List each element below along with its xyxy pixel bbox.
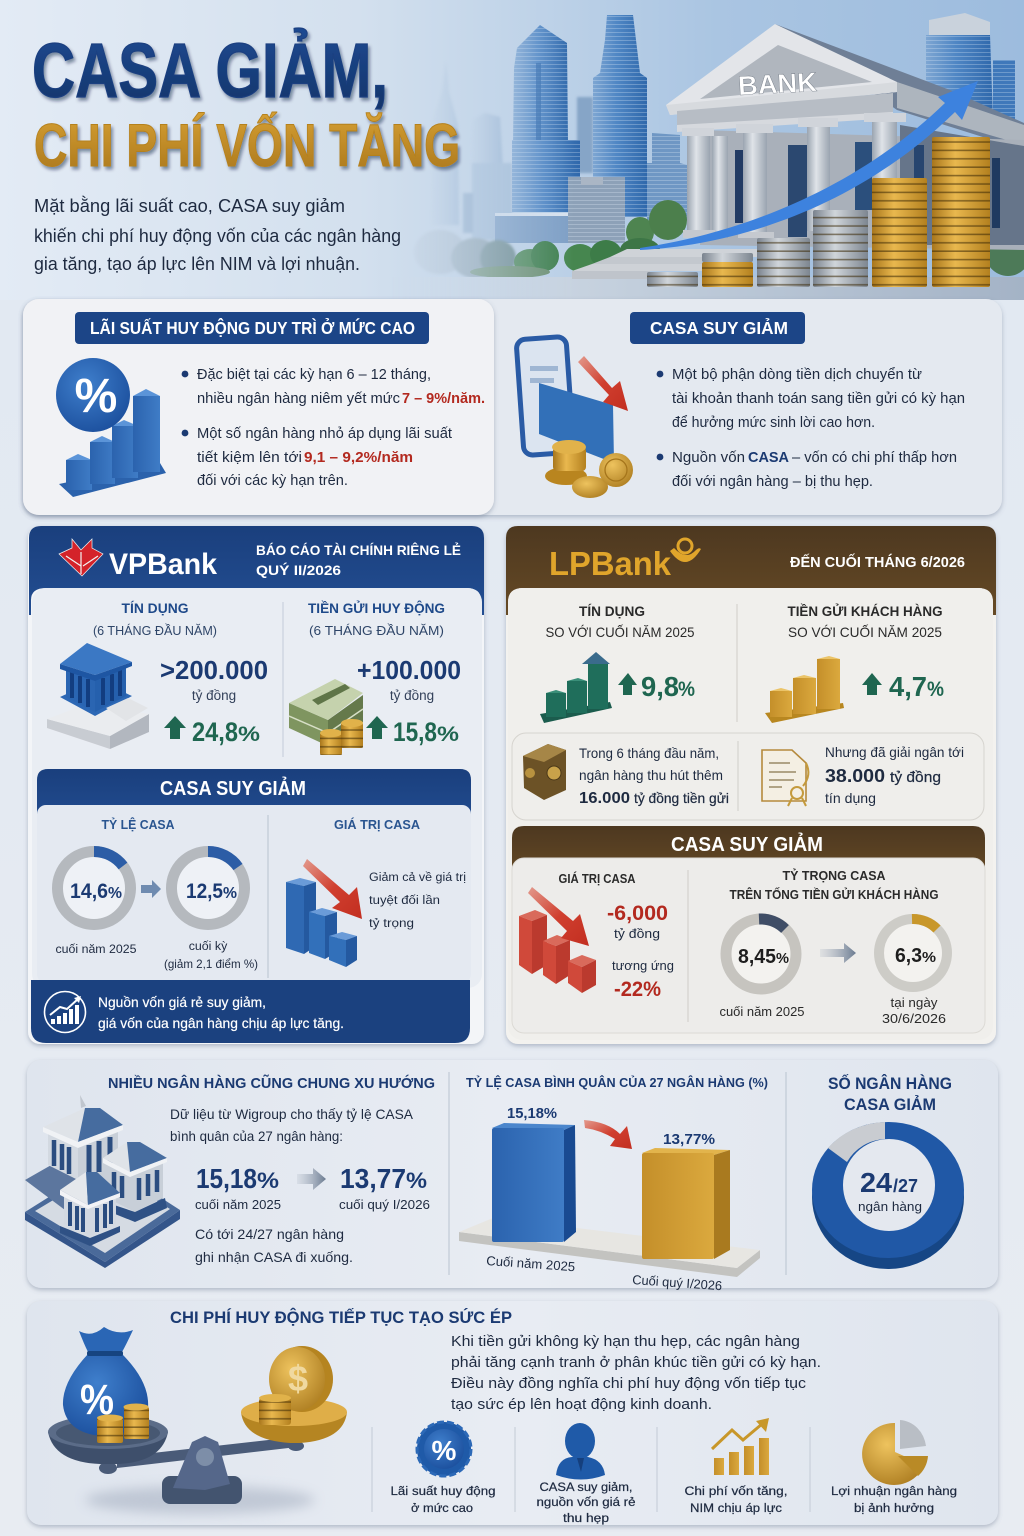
CASA value: [519, 871, 674, 1001]
sector text block: bình quân của 27 ngân hàng:: [170, 1128, 343, 1144]
panel: banking sector trend: [25, 1060, 998, 1293]
item: CASA falls: CASA suy giảm,: [540, 1480, 632, 1494]
sub-panel: mobilisation and disbursement: ngân hàng thu hút thêm: [579, 768, 723, 783]
item: high rates: %: [432, 1435, 457, 1466]
sector text block: cuối quý I/2026: [339, 1197, 430, 1212]
logo: LPBank: LPBank: [549, 545, 672, 582]
sub-panel: mobilisation and disbursement: 16.000: [579, 790, 630, 807]
sector text block: %: [406, 1168, 427, 1193]
callout: cheap funding falls: Nguồn vốn giá rẻ suy giảm,: [98, 994, 266, 1010]
icon: bank on documents: [47, 643, 149, 749]
inner card: [508, 588, 993, 1040]
LPBank header band: [506, 526, 996, 615]
icon: percent disc on bar chart: [56, 358, 166, 497]
icon: green up arrow: [164, 716, 186, 739]
CASA share donuts: 30/6/2026: [882, 1011, 946, 1026]
sub-panel: mobilisation and disbursement: tỷ đồng tiền gửi: [634, 791, 729, 806]
CASA share donuts: TRÊN TỐNG TIỀN GỬI KHÁCH HÀNG: [730, 887, 938, 902]
metric: credit: 24,8: [192, 717, 238, 747]
icon: green up arrow: [862, 673, 882, 695]
sub-panel: mobilisation and disbursement: [512, 733, 984, 820]
title: CASA GIẢM,: [32, 27, 388, 114]
metric: deposits: +100.000: [357, 655, 461, 685]
icon: falling red bars with arrow: [519, 887, 596, 993]
logo: VPBank: VPBank: [109, 548, 217, 581]
CASA value: -6,000: [607, 902, 668, 925]
CASA share donuts: 8,45: [738, 946, 776, 968]
donut: banks with declining CASA: [812, 1073, 964, 1269]
panel: CASA decline: [516, 312, 965, 498]
sector text block: 15,18: [196, 1163, 257, 1194]
metric: deposits: [289, 599, 461, 755]
CASA ratio donuts: 12,5: [186, 880, 223, 903]
icon: green bar chart: [540, 652, 612, 723]
CASA value: [286, 817, 466, 967]
item: cost rises: [684, 1418, 788, 1515]
bank building: [572, 24, 1024, 279]
bullet list: Đặc biệt tại các kỳ hạn 6 – 12 tháng,: [197, 367, 431, 383]
icon: red curved arrow: [584, 1120, 632, 1149]
CASA share donuts: %: [922, 949, 936, 966]
sub-panel: mobilisation and disbursement: Nhưng đã giải ngân tới: [825, 745, 964, 760]
item: CASA falls: [536, 1423, 636, 1525]
bullet list: nhiều ngân hàng niêm yết mức: [197, 391, 401, 407]
icon: group of bank buildings: [25, 1095, 180, 1268]
icon: safe: [523, 744, 566, 800]
metric: deposits: 15,8: [393, 717, 437, 747]
heading: interest rates: LÃI SUẤT HUY ĐỘNG DUY TRÌ Ở MỨC CAO: [90, 317, 415, 338]
CASA value: tỷ trọng: [369, 916, 414, 930]
bar chart: average CASA of 27 banks: TỶ LỆ CASA BÌNH QUÂN CỦA 27 NGÂN HÀNG (%): [466, 1075, 768, 1090]
donut: banks with declining CASA: /27: [893, 1176, 918, 1196]
title: CHI PHÍ VỐN TĂNG: [34, 112, 460, 179]
CASA share donuts: cuối năm 2025: [720, 1004, 804, 1019]
sector text block: cuối năm 2025: [195, 1197, 281, 1212]
donut: banks with declining CASA: 24: [860, 1167, 892, 1198]
metric: credit: >200.000: [160, 655, 268, 685]
metric: credit: %: [678, 678, 695, 701]
metric: customer deposits: [765, 602, 944, 723]
donut: banks with declining CASA: SỐ NGÂN HÀNG: [828, 1073, 952, 1093]
bar chart: average CASA of 27 banks: 15,18%: [507, 1105, 557, 1122]
text block: funding explanation: Điều này đồng nghĩa chi phí huy động vốn tiếp tục: [451, 1375, 806, 1392]
heading: funding cost: CHI PHÍ HUY ĐỘNG TIẾP TỤC TẠO SỨC ÉP: [170, 1308, 512, 1327]
CASA share donuts: [720, 868, 947, 1026]
bar chart: average CASA of 27 banks: [459, 1075, 768, 1293]
metric: credit: (6 THÁNG ĐẦU NĂM): [93, 623, 217, 638]
item: profit affected: [831, 1420, 957, 1515]
metric: deposits: %: [437, 723, 459, 746]
sub-panel: LPBank CASA decline: CASA SUY GIẢM: [671, 833, 823, 856]
panel: interest rates: [23, 299, 494, 515]
report label: QUÝ II/2026: [256, 561, 341, 579]
icon: rising blue arrow: [640, 81, 978, 250]
metric: customer deposits: TIỀN GỬI KHÁCH HÀNG: [788, 602, 942, 620]
bullet list: 9,1 – 9,2%/năm: [304, 450, 413, 466]
icon: chart in circle: [44, 992, 86, 1032]
sector text block: Có tới 24/27 ngân hàng: [195, 1226, 344, 1242]
icon: green up arrow: [618, 673, 637, 695]
bullet list: [657, 367, 965, 490]
icon: percent disc on bar chart: %: [75, 370, 117, 423]
bullet list: Một bộ phận dòng tiền dịch chuyển từ: [672, 367, 922, 383]
bullet list: đối với ngân hàng – bị thu hẹp.: [672, 474, 873, 490]
item: CASA falls: nguồn vốn giá rẻ: [536, 1495, 636, 1509]
CASA share donuts: 6,3: [895, 945, 922, 967]
bank sign: BANK: [737, 67, 818, 101]
CASA ratio donuts: %: [108, 885, 122, 902]
icon: green up arrow: [366, 716, 388, 739]
heading: CASA decline: [630, 312, 805, 344]
metric: credit: SO VỚI CUỐI NĂM 2025: [546, 623, 695, 640]
LPBank header band: ĐẾN CUỐI THÁNG 6/2026: [790, 553, 965, 571]
CASA ratio donuts: cuối kỳ: [189, 939, 228, 953]
metric: deposits: (6 THÁNG ĐẦU NĂM): [309, 623, 444, 638]
CASA value: GIÁ TRỊ CASA: [558, 871, 636, 886]
CASA value: tỷ đồng: [614, 926, 660, 941]
CASA ratio donuts: (giảm 2,1 điểm %): [164, 957, 258, 971]
CASA share donuts: %: [776, 950, 789, 967]
CASA value: tuyệt đối lần: [369, 893, 440, 907]
intro text: khiến chi phí huy động vốn của các ngân hàng: [34, 225, 401, 246]
icon: falling blue bars with red arrow: [286, 859, 362, 967]
panel: LPBank: [506, 526, 996, 1044]
bullet list: để hưởng mức sinh lời cao hơn.: [672, 415, 875, 431]
panel: interest rates and CASA decline: [23, 299, 1002, 515]
metric: credit: %: [238, 723, 260, 746]
text block: funding explanation: phải tăng cạnh tranh ở phân khúc tiền gửi có kỳ hạn.: [451, 1354, 821, 1371]
metric: deposits: TIỀN GỬI HUY ĐỘNG: [308, 599, 445, 617]
item: high rates: Lãi suất huy động: [390, 1484, 496, 1498]
bullet list: tài khoản thanh toán sang tiền gửi có kỳ hạn: [672, 391, 965, 407]
text block: funding explanation: Khi tiền gửi không kỳ hạn thu hẹp, các ngân hàng: [451, 1333, 800, 1350]
item: CASA falls: thu hẹp: [563, 1511, 609, 1525]
icon: gold bar chart: [765, 656, 844, 723]
icon: balance scale with percent bag and gold coin: %: [80, 1376, 114, 1424]
metric: credit: 9,8: [641, 671, 679, 702]
bar chart: average CASA of 27 banks: 13,77%: [663, 1131, 715, 1148]
item: high rates: [390, 1422, 496, 1515]
donut: banks with declining CASA: CASA GIẢM: [844, 1095, 936, 1114]
callout: cheap funding falls: [31, 980, 470, 1043]
metric: credit: TÍN DỤNG: [122, 600, 188, 617]
panel: funding cost pressure: [27, 1301, 998, 1525]
bullet list: – vốn có chi phí thấp hơn: [792, 450, 957, 466]
report label: BÁO CÁO TÀI CHÍNH RIÊNG LẺ: [256, 541, 461, 559]
CASA value: GIÁ TRỊ CASA: [334, 817, 420, 832]
logo: LPBank: [549, 539, 701, 582]
metric: credit: TÍN DỤNG: [579, 603, 645, 620]
panel: VPBank: [28, 526, 484, 1044]
icon: balance scale with percent bag and gold coin: $: [288, 1358, 308, 1399]
sub-panel: mobilisation and disbursement: Trong 6 tháng đầu năm,: [579, 746, 719, 761]
intro text: [34, 195, 401, 274]
CASA ratio donuts: [56, 817, 258, 971]
sector text block: [108, 1074, 435, 1265]
CASA ratio donuts: cuối năm 2025: [56, 942, 137, 956]
callout: cheap funding falls: giá vốn của ngân hàng chịu áp lực tăng.: [98, 1015, 344, 1031]
sector text block: Dữ liệu từ Wigroup cho thấy tỷ lệ CASA: [170, 1106, 414, 1122]
CASA value: tương ứng: [612, 958, 674, 973]
sub-panel: VPBank CASA decline: CASA SUY GIẢM: [160, 777, 306, 800]
title: [32, 27, 460, 179]
metric: deposits: tỷ đồng: [390, 688, 434, 703]
icon: signed document: [762, 750, 808, 806]
metric: credit: [540, 603, 695, 723]
bullet list: CASA: [748, 450, 789, 466]
heading: interest rates: [75, 312, 429, 344]
coin stacks: [647, 137, 990, 287]
metric: customer deposits: 4,7: [889, 671, 927, 702]
sector text block: ghi nhận CASA đi xuống.: [195, 1249, 353, 1265]
intro text: gia tăng, tạo áp lực lên NIM và lợi nhuận.: [34, 253, 360, 274]
metric: customer deposits: SO VỚI CUỐI NĂM 2025: [788, 623, 942, 640]
sector text block: %: [257, 1168, 279, 1193]
bullet list: 7 – 9%/năm.: [402, 391, 485, 407]
hero illustration: city skyline, bank, coins and rising arrow: [204, 0, 1024, 300]
icon: grey arrow: [820, 943, 856, 963]
CASA ratio donuts: %: [223, 885, 237, 902]
CASA share donuts: TỶ TRỌNG CASA: [782, 868, 886, 883]
CASA ratio donuts: 14,6: [70, 880, 108, 903]
text block: funding explanation: tạo sức ép lên hoạt động kinh doanh.: [451, 1396, 712, 1413]
VPBank header band: [29, 526, 484, 615]
sub-panel: mobilisation and disbursement: tỷ đồng: [890, 770, 941, 786]
sub-panel: mobilisation and disbursement: 38.000: [825, 766, 885, 786]
metric: customer deposits: %: [927, 678, 944, 701]
bar chart: average CASA of 27 banks: Cuối quý I/2026: [632, 1272, 723, 1293]
sector text block: 13,77: [340, 1163, 406, 1194]
icon: grey arrow: [297, 1168, 326, 1190]
CASA ratio donuts: TỶ LỆ CASA: [102, 817, 175, 832]
item: profit affected: bị ảnh hưởng: [854, 1501, 934, 1515]
item: cost rises: NIM chịu áp lực: [690, 1501, 782, 1515]
item: cost rises: Chi phí vốn tăng,: [684, 1484, 788, 1498]
CASA value: -22%: [614, 978, 661, 1001]
metric: credit: [47, 600, 268, 749]
sub-panel: LPBank CASA decline: [512, 826, 985, 1033]
bullet list: Nguồn vốn: [672, 450, 745, 466]
bullet list: tiết kiệm lên tới: [197, 450, 302, 466]
icon: balance scale with percent bag and gold coin: [48, 1327, 347, 1514]
inner card: [32, 588, 482, 988]
metric: credit: tỷ đồng: [192, 688, 236, 703]
sub-panel: VPBank CASA decline: [37, 769, 471, 983]
logo: VPBank: [59, 539, 217, 581]
CASA value: Giảm cả về giá trị: [369, 870, 466, 884]
icon: grey arrow: [141, 880, 161, 898]
bullet list: Một số ngân hàng nhỏ áp dụng lãi suất: [197, 426, 452, 442]
item: high rates: ở mức cao: [411, 1501, 473, 1515]
item: profit affected: Lợi nhuận ngân hàng: [831, 1484, 957, 1498]
bullet list: [182, 367, 485, 489]
report label: [256, 541, 461, 579]
sector text block: NHIỀU NGÂN HÀNG CŨNG CHUNG XU HƯỚNG: [108, 1074, 435, 1092]
donut: banks with declining CASA: ngân hàng: [858, 1199, 922, 1214]
CASA share donuts: tại ngày: [890, 995, 938, 1010]
icon: phone, bank card, coins, red arrow: [516, 336, 633, 498]
sub-panel: mobilisation and disbursement: tín dụng: [825, 791, 876, 806]
intro text: Mặt bằng lãi suất cao, CASA suy giảm: [34, 195, 345, 216]
bar chart: average CASA of 27 banks: Cuối năm 2025: [486, 1253, 576, 1274]
heading: CASA decline: CASA SUY GIẢM: [650, 317, 788, 338]
bullet list: đối với các kỳ hạn trên.: [197, 473, 348, 489]
text block: funding explanation: [451, 1333, 821, 1413]
icon: money stacks and coins: [289, 679, 363, 755]
